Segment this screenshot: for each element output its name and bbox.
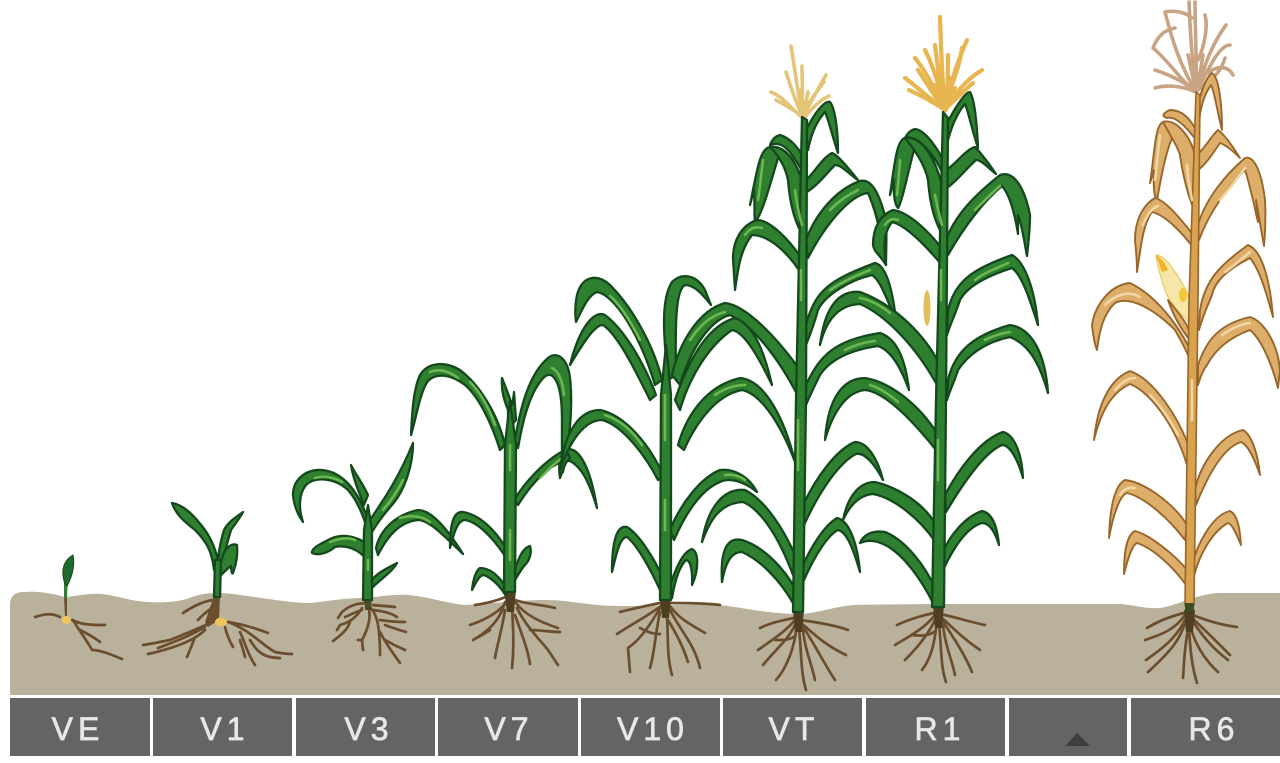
stage label bar: V7 bbox=[484, 711, 534, 747]
plant: V3 bbox=[293, 443, 463, 663]
plant: V1 bbox=[143, 503, 292, 665]
ear bbox=[1156, 255, 1195, 328]
stage label bar: V10 bbox=[617, 711, 689, 747]
stage label bar: V1 bbox=[200, 711, 250, 747]
stage label bar: R6 bbox=[1189, 711, 1239, 747]
tassel bbox=[1153, 2, 1233, 92]
tassel bbox=[905, 17, 982, 110]
stage label bar bbox=[10, 698, 1280, 756]
plant: V10 bbox=[560, 276, 800, 675]
plant: V7 bbox=[411, 355, 597, 668]
stage label bar: VE bbox=[52, 711, 104, 747]
stage label bar: R1 bbox=[915, 711, 965, 747]
plant: R1 bbox=[820, 17, 1048, 682]
stage label bar: V3 bbox=[344, 711, 394, 747]
tassel bbox=[771, 46, 829, 118]
plant: VE bbox=[35, 555, 122, 659]
plant: VT bbox=[702, 46, 909, 690]
soil band bbox=[10, 592, 1280, 695]
plant: R6 bbox=[1092, 2, 1280, 683]
ear bbox=[924, 290, 930, 326]
stage label bar: VT bbox=[769, 711, 819, 747]
